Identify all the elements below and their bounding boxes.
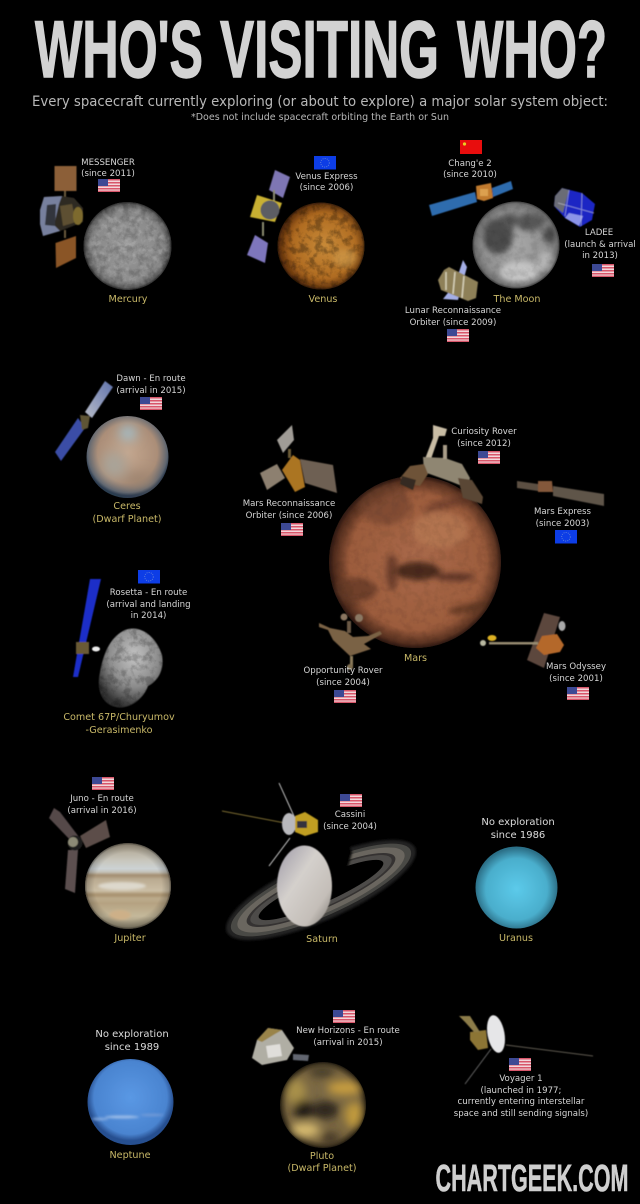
label: New Horizons: (arrival in 2015) [313,1038,383,1048]
label: Mars Express [534,507,592,529]
planet: Mars [328,476,502,648]
name: Pluto [287,1151,357,1174]
name: Mars: Mars [404,653,427,664]
label: Voyager 1: Voyager 1 [499,1074,543,1084]
planet: Ceres [86,416,168,498]
label: New Horizons [296,1026,400,1048]
name: Venus: Venus [309,294,337,305]
label: Venus Express [295,172,358,193]
spacecraft: Chang'e 2 [429,181,513,216]
name: Saturn: Saturn [306,934,338,945]
label: Lunar Reconnaissance Orbiter [405,306,501,328]
title [35,5,607,95]
panel: Neptune [88,1029,174,1161]
flag: USA [509,1058,531,1071]
panel: Mercury [40,158,172,305]
label: Mars Odyssey: Mars Odyssey [546,662,606,672]
panel: Pluto [252,1010,400,1174]
label: Opportunity Rover: (since 2004) [316,678,370,688]
name: Pluto: (Dwarf Planet) [287,1163,357,1174]
label: Chang'e 2: (since 2010) [443,170,497,180]
label: Rosetta: (arrival and landing [106,600,191,610]
label: Mars Express: (since 2003) [536,519,589,529]
flag: USA [447,329,469,342]
label: LADEE: LADEE [585,228,613,238]
flag: China [460,140,482,154]
label: Juno: (arrival in 2016) [67,806,137,816]
label: Rosetta [106,588,191,621]
flag: USA [140,397,162,410]
spacecraft: Curiosity Rover [400,425,483,504]
label: no exploration: No exploration [95,1029,169,1040]
label: Opportunity Rover [303,666,383,688]
label: MESSENGER: (since 2011) [81,169,135,179]
label: Mars Reconnaissance Orbiter: Orbiter (since 2006) [246,511,332,521]
flag: USA [567,687,589,700]
planet: Moon [472,201,560,289]
label: Voyager 1: space and still sending signals) [454,1109,588,1119]
spacecraft: Mars Express [517,481,604,506]
spacecraft: Opportunity Rover [319,614,382,670]
spacecraft: Mars Odyssey [480,613,566,668]
label: Juno: Juno - En route [69,794,134,804]
flag: USA [334,690,356,703]
name: Uranus: Uranus [499,933,533,944]
spacecraft: Lunar Reconnaissance Orbiter [438,260,478,301]
planet: Mercury [83,202,172,290]
label: MESSENGER: MESSENGER [81,158,135,168]
label: LADEE [564,228,636,261]
label: no exploration: since 1986 [491,830,545,841]
rings: Saturn [215,821,427,959]
planet: Saturn [277,846,332,926]
label: Cassini: Cassini [335,810,365,820]
spacecraft: LADEE [554,188,595,227]
name: Ceres: (Dwarf Planet) [92,514,162,525]
planet shadow on rings [318,838,352,890]
spacecraft: Rosetta [73,579,101,677]
panel: Ceres [55,374,186,525]
name: Ceres: Ceres [113,501,141,512]
label: no exploration: No exploration [481,817,555,828]
label: Lunar Reconnaissance Orbiter: Lunar Reconnaissance [405,306,501,316]
flag: EU [555,530,577,544]
name: Jupiter: Jupiter [113,933,146,944]
flag: USA [340,794,362,807]
label: Juno [67,794,137,816]
panel: Voyager 1 [454,1014,593,1119]
name: Pluto: Pluto [310,1151,334,1162]
planet: Comet 67P [98,628,164,708]
panel: The Moon [405,140,636,342]
spacecraft: Voyager 1 [459,1014,593,1084]
label: Curiosity Rover [451,427,517,449]
label: Voyager 1 [454,1074,588,1119]
planet: Uranus [476,846,558,928]
flag: USA [281,523,303,536]
flag: USA [92,777,114,790]
label: Cassini: (since 2004) [323,822,377,832]
spacecraft: Mars Reconnaissance Orbiter [260,425,337,493]
name: Comet 67P: -Gerasimenko [85,725,153,736]
name: Comet 67P: Comet 67P/Churyumov [63,712,175,723]
label: Opportunity Rover: Opportunity Rover [303,666,383,676]
planet: Venus [277,202,365,290]
name: Comet 67P [63,712,175,736]
label: LADEE: in 2013) [582,251,618,261]
label: Mars Express: Mars Express [534,507,592,517]
label: Chang'e 2: Chang'e 2 [448,159,492,169]
label: Dawn [116,374,186,396]
label: no exploration: since 1989 [105,1042,159,1053]
label: Curiosity Rover: Curiosity Rover [451,427,517,437]
name: Neptune: Neptune [110,1150,151,1161]
flag: USA [98,179,120,192]
label: Cassini [323,810,377,832]
spacecraft: Dawn [55,381,113,461]
spacecraft: Cassini [222,783,318,866]
spacecraft: Juno [49,808,110,893]
planet: Neptune [88,1059,174,1145]
spacecraft: Venus Express [247,170,290,263]
label: Venus Express: Venus Express [295,172,358,182]
flag: USA [333,1010,355,1023]
name: Mercury: Mercury [109,294,148,305]
label: MESSENGER [81,158,135,179]
footnote: *Does not include spacecraft orbiting the Earth or Sun [191,112,449,123]
panel: Venus [247,156,365,305]
label: Mars Odyssey [546,662,606,684]
name: The Moon: The Moon [492,294,540,305]
label: Mars Reconnaissance Orbiter [243,499,335,521]
label: Mars Reconnaissance Orbiter: Mars Reconnaissance [243,499,335,509]
label: Lunar Reconnaissance Orbiter: Orbiter (since 2009) [410,318,496,328]
label: Rosetta: Rosetta - En route [110,588,187,598]
spacecraft: MESSENGER [40,166,83,268]
planet: Jupiter [85,843,171,929]
flag: USA [592,264,614,277]
flag: EU [314,156,336,170]
label: no exploration [95,1029,169,1053]
panel: Saturn [215,783,427,959]
flag: USA [478,451,500,464]
label: Voyager 1: (launched in 1977; [481,1086,561,1096]
label: LADEE: (launch & arrival [564,240,636,250]
planet: Pluto [280,1062,366,1148]
label: New Horizons: New Horizons - En route [296,1026,400,1036]
label: Dawn: Dawn - En route [116,374,186,384]
label: no exploration [481,817,555,841]
spacecraft: New Horizons [252,1028,309,1065]
panel: Uranus [476,817,558,944]
label: Rosetta: in 2014) [131,611,166,621]
panel: Mars [243,425,606,703]
panel: Jupiter [49,777,171,944]
label: Venus Express: (since 2006) [300,183,353,193]
label: Dawn: (arrival in 2015) [116,386,186,396]
flag: EU [138,570,160,584]
label: Mars Odyssey: (since 2001) [549,674,603,684]
name: Ceres [92,501,162,525]
label: Curiosity Rover: (since 2012) [457,439,511,449]
panel: Comet 67P [63,570,191,736]
label: Chang'e 2 [443,159,497,180]
label: Voyager 1: currently entering interstellar [458,1097,585,1107]
title: WHO'S [35,5,203,95]
title: VISITING [220,5,439,95]
